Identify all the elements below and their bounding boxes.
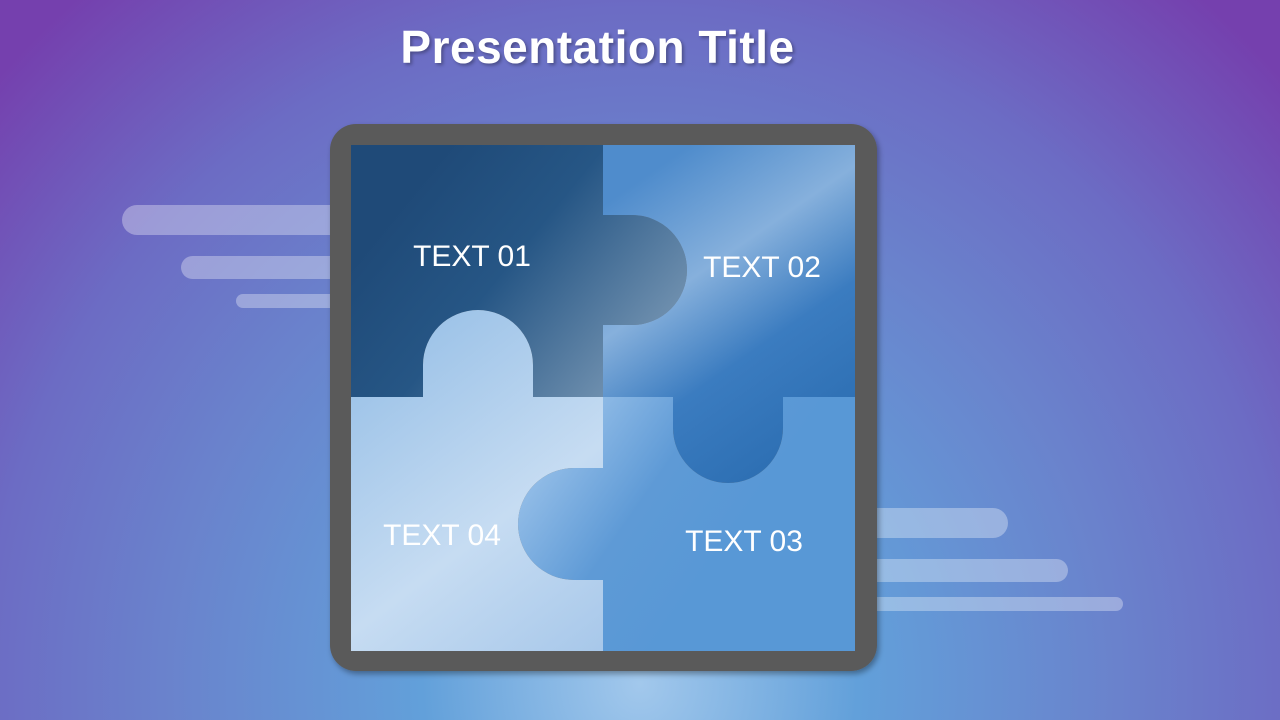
labels	[383, 240, 821, 558]
piece 2	[603, 145, 855, 483]
decorative bars left	[122, 205, 330, 308]
labels: TEXT 04	[383, 519, 501, 552]
labels: TEXT 03	[685, 525, 803, 558]
title: Presentation Title	[400, 21, 795, 73]
piece 3	[518, 397, 855, 651]
decorative bars right	[877, 508, 1123, 611]
frame	[330, 124, 877, 671]
piece 1	[351, 145, 687, 397]
labels: TEXT 02	[703, 251, 821, 284]
piece 4	[351, 310, 603, 651]
labels: TEXT 01	[413, 240, 531, 273]
